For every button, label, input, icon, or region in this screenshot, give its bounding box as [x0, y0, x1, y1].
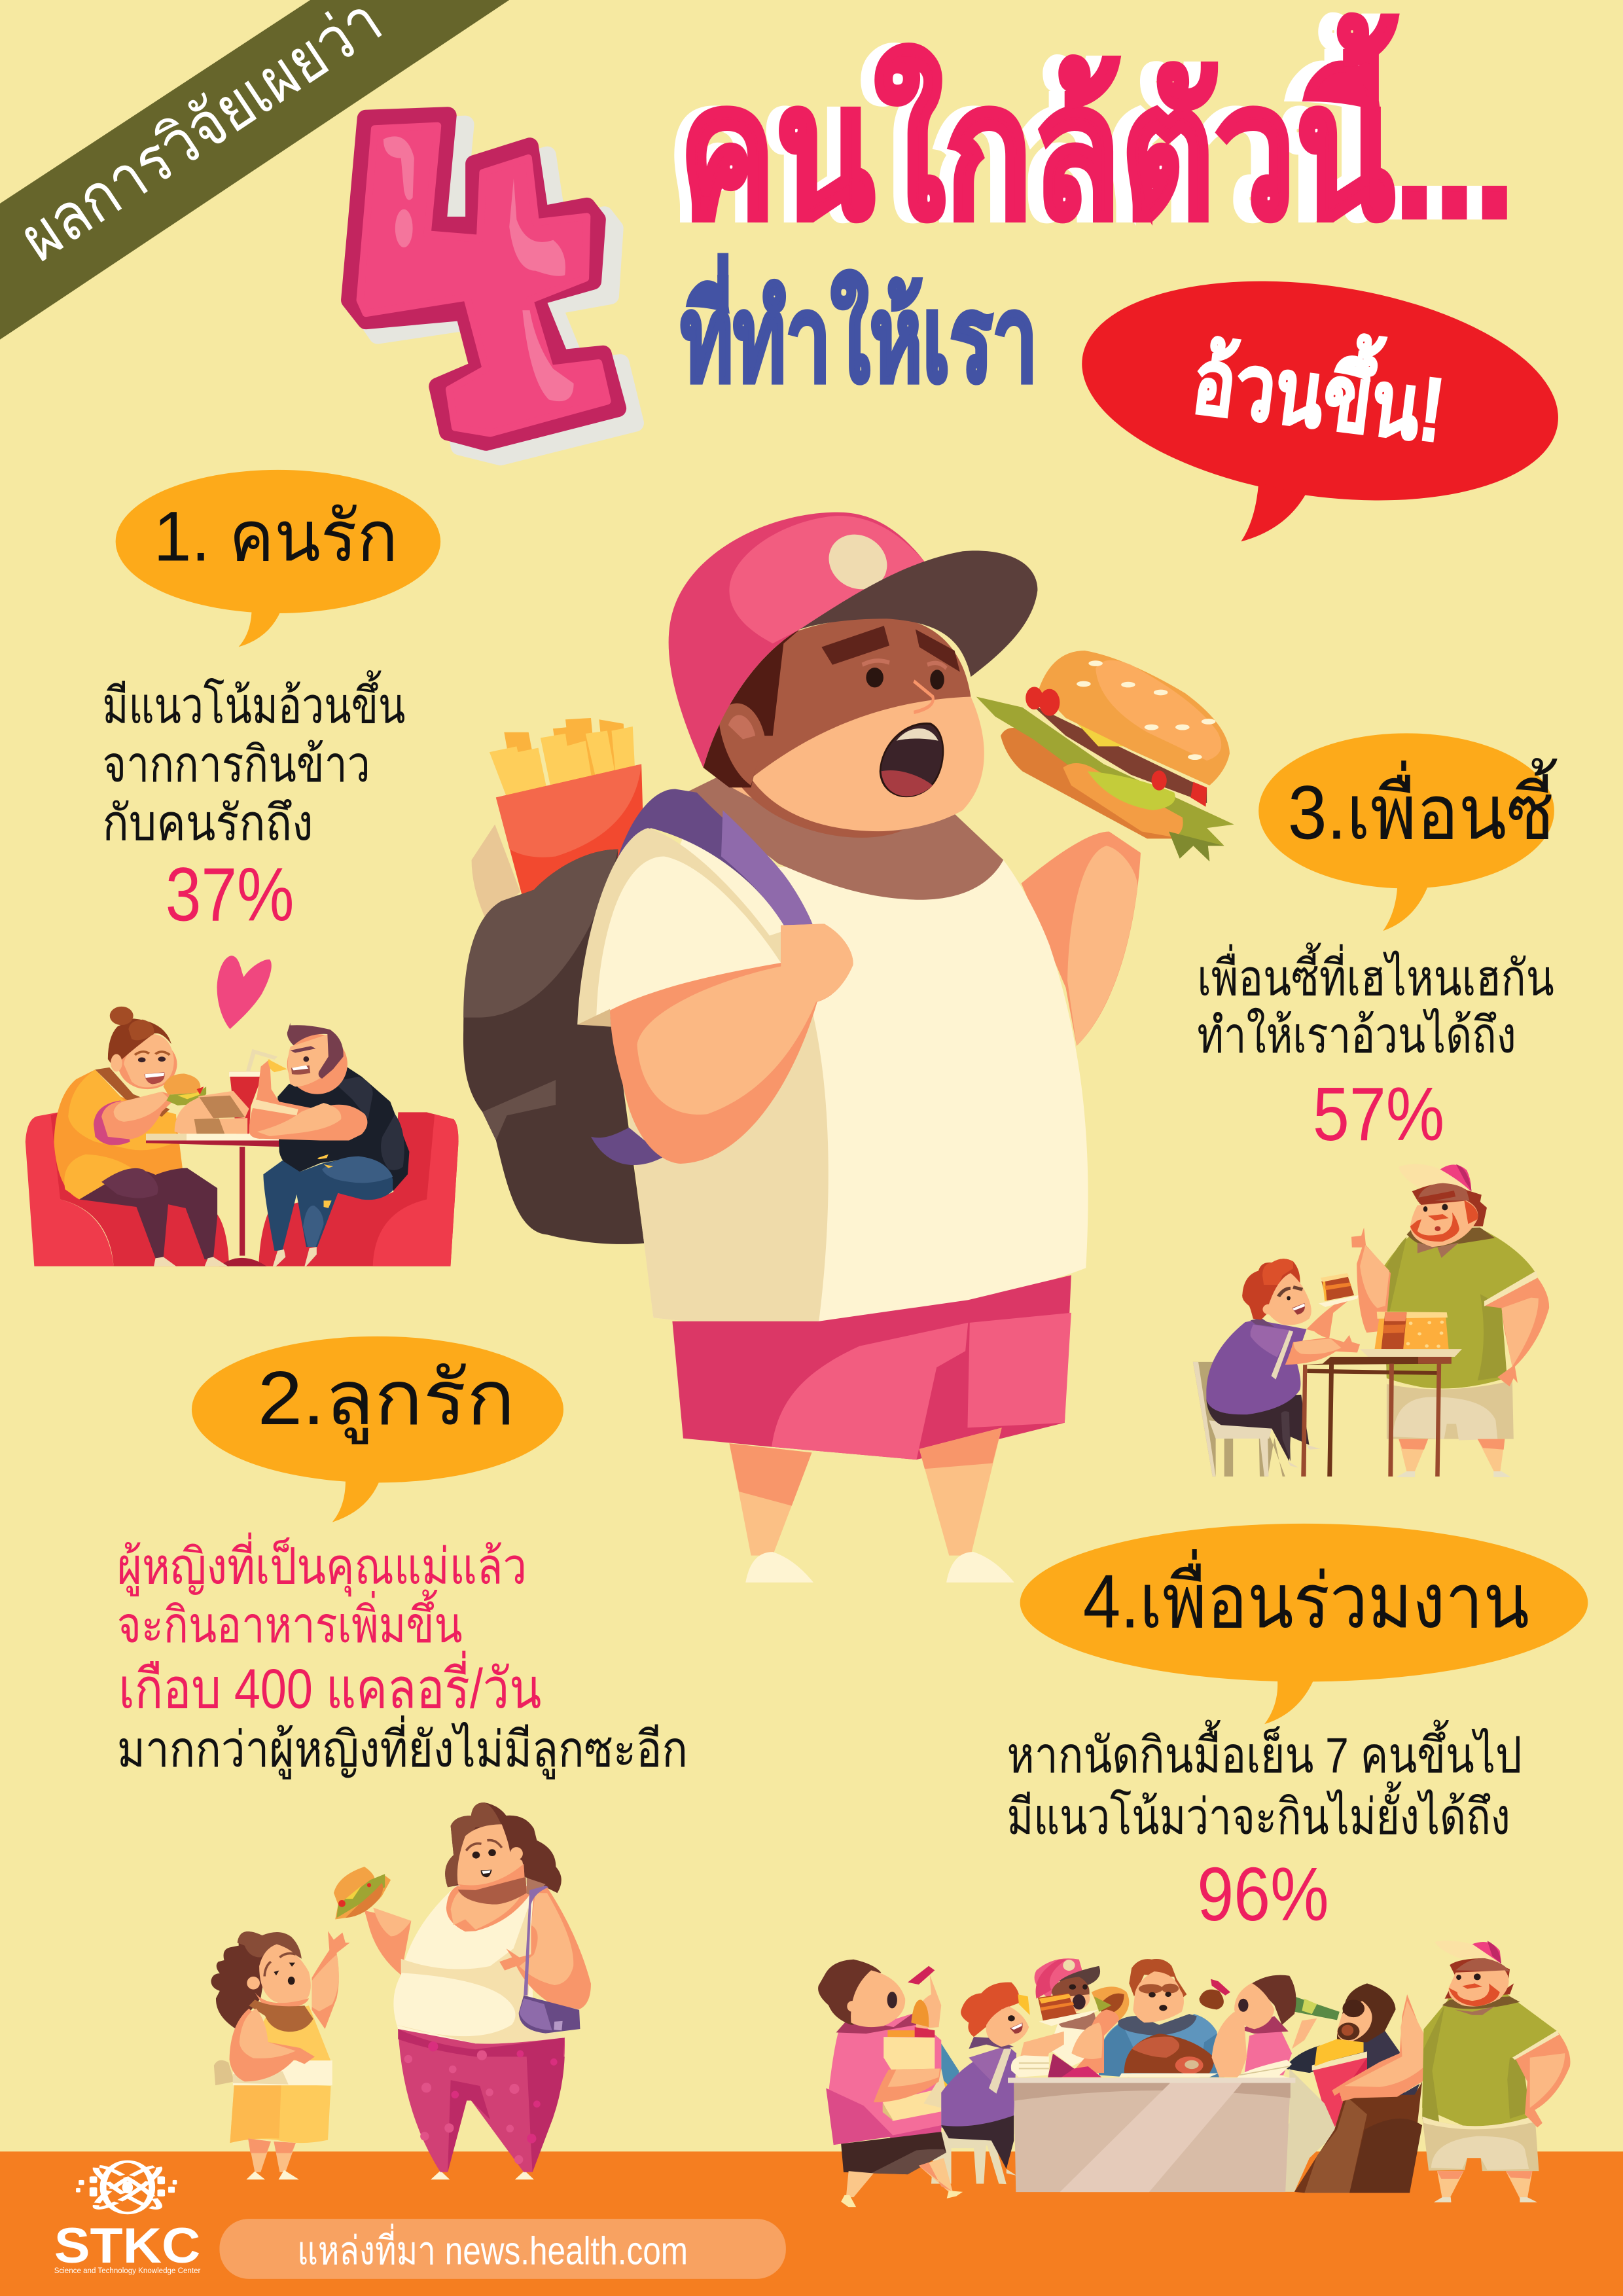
section 1 heading bubble: 1. คนรัก: [154, 497, 398, 575]
speech bubble: get fatter: [1068, 253, 1573, 541]
arm: [610, 924, 853, 1164]
illustration: couple at table: [26, 956, 459, 1266]
section 1 text: กับคนรักถึง: [103, 796, 313, 852]
stat 37%: 37%: [166, 852, 294, 937]
footer band: [0, 2151, 1623, 2296]
burger: [976, 651, 1234, 861]
section 2 heading bubble: 2.ลูกรัก: [258, 1355, 515, 1444]
logo tagline: Science and Technology Knowledge Center: [54, 2266, 200, 2275]
section 4 text: มีแนวโน้มว่าจะกินไม่ยั้งได้ถึง: [1007, 1781, 1510, 1845]
backpack: [463, 850, 644, 1244]
section 3 heading bubble: 3.เพื่อนซี้: [1288, 758, 1558, 855]
section 1 text: จากการกินข้าว: [103, 737, 370, 793]
illustration: main boy with burger: [463, 512, 1234, 1583]
strap: [610, 789, 817, 954]
illustration: mother and daughter: [211, 1803, 591, 2179]
section 4 text: หากนัดกินมื้อเย็น 7 คนขึ้นไป: [1007, 1719, 1522, 1784]
illustration: group dinner with colleagues: [818, 1941, 1570, 2207]
section 3 heading bubble: [1258, 733, 1558, 931]
logo wordmark: STKC: [54, 2218, 200, 2274]
torso: [615, 832, 1088, 1323]
section 4 text: [1007, 1719, 1522, 1845]
fries: [490, 718, 645, 895]
section 2 text: มากกว่าผู้หญิงที่ยังไม่มีลูกซะอีก: [117, 1715, 688, 1780]
section 1 heading bubble: [116, 470, 440, 647]
section 1 text: [103, 670, 405, 852]
cap: [669, 512, 1037, 768]
section 2 text: ผู้หญิงที่เป็นคุณแม่แล้ว: [117, 1533, 527, 1597]
stat 96%: 96%: [1197, 1852, 1329, 1937]
section 1 text: มีแนวโน้มอ้วนขึ้น: [103, 670, 405, 734]
stat 57%: 57%: [1313, 1071, 1444, 1157]
section 4 heading bubble: [1020, 1524, 1588, 1724]
legs: [729, 1427, 1014, 1583]
section 4 heading bubble: 4.เพื่อนร่วมงาน: [1083, 1549, 1529, 1644]
logo: STKC: [76, 2162, 177, 2213]
paper bag: [472, 825, 520, 920]
section 3 text: เพื่อนซี้ที่เฮไหนเฮกัน: [1197, 942, 1554, 1007]
illustration: two friends with cake: [1193, 1164, 1549, 1477]
lower strap: [591, 1128, 664, 1165]
banner: research reveals: [0, 0, 509, 340]
neck: [686, 771, 1003, 900]
atom icon: [76, 2162, 177, 2213]
big numeral 4: [349, 116, 635, 457]
section 2 heading bubble: [192, 1336, 563, 1522]
raised arm: [1022, 832, 1141, 1046]
section 2 text: จะกินอาหารเพิ่มขึ้น: [117, 1589, 463, 1653]
section 2 text: [117, 1533, 688, 1780]
shirt sleeve: [577, 828, 792, 1027]
head: [704, 617, 984, 838]
subtitle: that make us: ที่ทำให้เรา: [681, 255, 1038, 406]
section 2 text: เกือบ 400 แคลอรี่/วัน: [118, 1651, 541, 1721]
source pill: [219, 2219, 786, 2279]
section 3 text: [1197, 942, 1554, 1064]
section 3 text: ทำให้เราอ้วนได้ถึง: [1197, 1007, 1516, 1064]
shorts: [672, 1275, 1071, 1460]
source pill: แหล่งที่มา news.health.com: [297, 2223, 688, 2272]
speech bubble: get fatter: อ้วนขึ้น!: [1187, 314, 1452, 461]
